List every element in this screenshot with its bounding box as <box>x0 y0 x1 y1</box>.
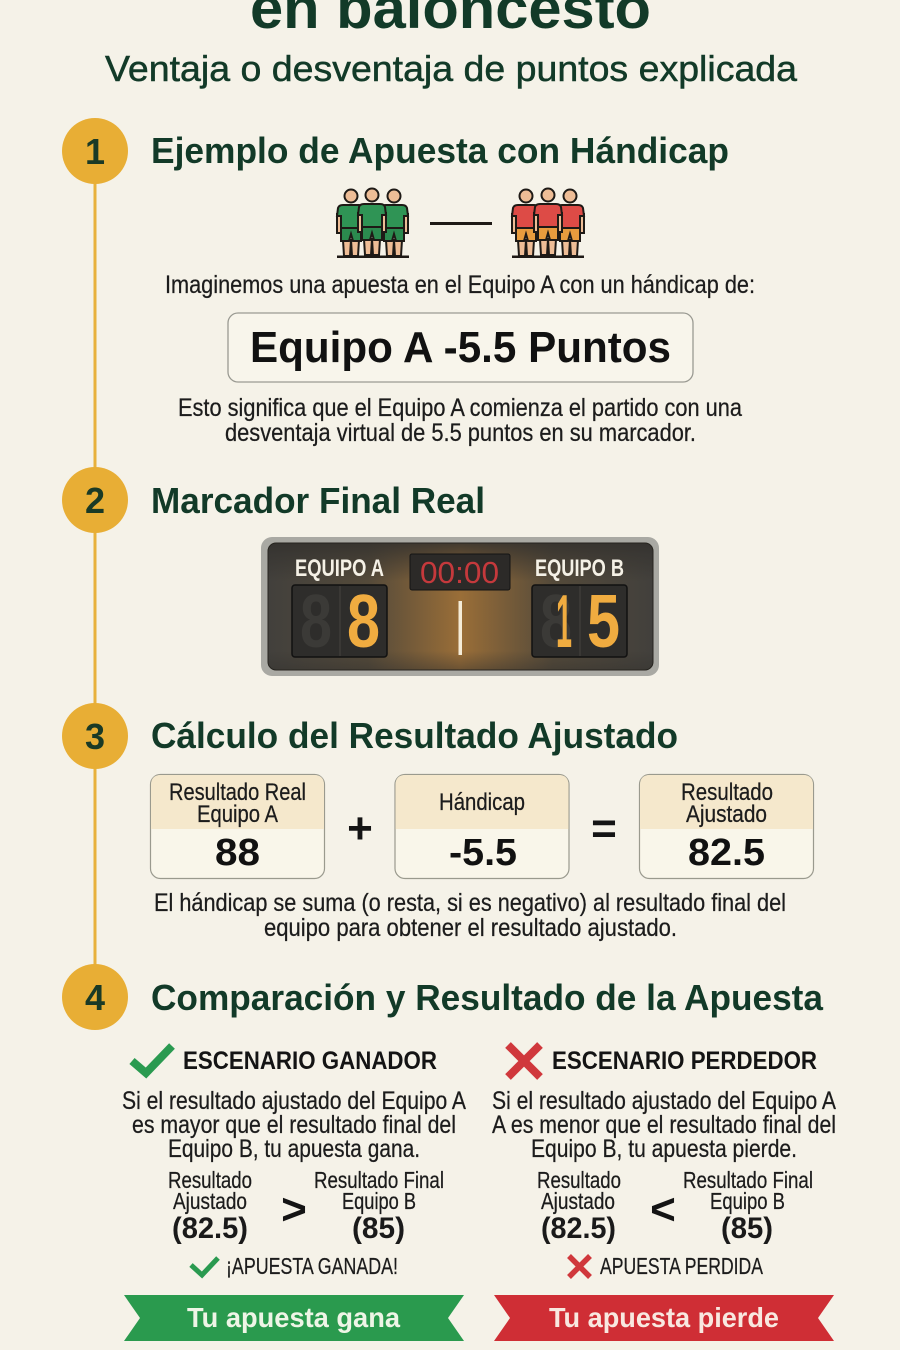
losing description: Equipo B, tu apuesta pierde. <box>531 1135 797 1163</box>
team B value: Equipo B <box>342 1188 416 1214</box>
adjusted result value: Resultado <box>537 1167 621 1193</box>
adjusted result value: Ajustado <box>541 1188 615 1214</box>
team B value: (85) <box>352 1212 405 1245</box>
team B value: Equipo B <box>710 1188 785 1214</box>
calc box: adjusted result <box>640 774 814 878</box>
less than sign: < <box>650 1185 676 1234</box>
calc box: real result: Resultado Real <box>169 779 306 806</box>
clock: 00:00 <box>420 555 499 590</box>
winning description: es mayor que el resultado final del <box>132 1111 456 1139</box>
explanation text: desventaja virtual de 5.5 puntos en su marcador. <box>225 419 696 447</box>
team B value <box>314 1167 444 1245</box>
winning description: Si el resultado ajustado del Equipo A <box>122 1087 466 1115</box>
red banner: Tu apuesta pierde <box>549 1302 779 1333</box>
calc explanation <box>154 889 786 942</box>
calc box: real result <box>150 774 324 878</box>
green banner <box>124 1295 464 1341</box>
greater than sign: > <box>281 1185 307 1234</box>
subtitle: Ventaja o desventaja de puntos explicada <box>105 48 798 89</box>
score team B: 1 <box>556 579 572 663</box>
versus dash <box>430 222 492 225</box>
adjusted result value: Resultado <box>168 1167 252 1193</box>
lost label: APUESTA PERDIDA <box>600 1253 763 1279</box>
step 1 badge: 1 <box>85 131 105 172</box>
calc box: handicap: Hándicap <box>439 789 525 816</box>
score team B <box>532 579 627 663</box>
adjusted result value: Ajustado <box>173 1188 247 1214</box>
explanation text <box>178 394 742 447</box>
step 2 badge: 2 <box>85 480 105 521</box>
adjusted result value <box>537 1167 621 1245</box>
panel: losing scenario <box>492 1045 836 1341</box>
heading: ejemplo: Ejemplo de Apuesta con Hándicap <box>151 130 729 171</box>
calc box: adjusted result: Resultado <box>681 779 773 806</box>
calc box: adjusted result: 82.5 <box>688 832 765 874</box>
losing heading: ESCENARIO PERDEDOR <box>552 1047 817 1075</box>
team B value <box>683 1167 813 1245</box>
losing description: A es menor que el resultado final del <box>492 1111 836 1139</box>
adjusted result value: (82.5) <box>172 1212 248 1245</box>
plus sign: + <box>347 804 373 853</box>
calc explanation: El hándicap se suma (o resta, si es negativo) al resultado final del <box>154 889 786 917</box>
heading: marcador: Marcador Final Real <box>151 480 485 521</box>
step 1 badge <box>62 118 128 184</box>
heading: calculo: Cálculo del Resultado Ajustado <box>151 715 678 756</box>
losing description: Si el resultado ajustado del Equipo A <box>492 1087 836 1115</box>
step 2 badge <box>62 467 128 533</box>
red banner <box>494 1295 834 1341</box>
heading: comparacion: Comparación y Resultado de la Apuesta <box>151 977 824 1018</box>
team B value: (85) <box>721 1212 773 1245</box>
calc box: real result: 88 <box>215 832 260 874</box>
score team A: 8 <box>300 579 332 663</box>
green banner: Tu apuesta gana <box>187 1302 400 1333</box>
center divider <box>458 601 462 655</box>
won label: ¡APUESTA GANADA! <box>226 1253 398 1279</box>
score team B: 5 <box>587 579 620 663</box>
team B value: Resultado Final <box>683 1167 813 1193</box>
score team A: 8 <box>347 579 380 663</box>
icon: green check <box>132 1046 172 1073</box>
calc box: handicap <box>395 774 569 878</box>
adjusted result value <box>168 1167 252 1245</box>
calc box: adjusted result: Ajustado <box>686 801 767 828</box>
calc box: real result: Equipo A <box>197 801 278 828</box>
panel: winning scenario <box>122 1046 466 1341</box>
score team A <box>292 579 387 663</box>
winning heading: ESCENARIO GANADOR <box>183 1047 437 1075</box>
icon: small check <box>191 1258 218 1275</box>
icon: team B players <box>512 188 584 258</box>
adjusted result value: (82.5) <box>541 1212 616 1245</box>
equals sign: = <box>591 804 617 853</box>
step 4 badge: 4 <box>85 977 105 1018</box>
explanation text: Esto significa que el Equipo A comienza el partido con una <box>178 394 742 422</box>
calc explanation: equipo para obtener el resultado ajustado. <box>264 914 677 942</box>
icon: small cross <box>569 1256 590 1277</box>
intro text: Imaginemos una apuesta en el Equipo A con un hándicap de: <box>165 271 755 299</box>
step 4 badge <box>62 964 128 1030</box>
winning description: Equipo B, tu apuesta gana. <box>168 1135 420 1163</box>
team B label: EQUIPO B <box>535 555 624 582</box>
handicap box <box>228 313 693 382</box>
calc box: handicap: -5.5 <box>449 832 517 874</box>
winning description <box>122 1087 466 1163</box>
losing description <box>492 1087 836 1163</box>
team A label: EQUIPO A <box>295 555 384 582</box>
scoreboard <box>261 537 659 676</box>
score team B: 8 <box>540 579 572 663</box>
timeline line <box>94 151 96 997</box>
icon: red cross <box>508 1045 540 1077</box>
step 3 badge: 3 <box>85 716 105 757</box>
handicap box: Equipo A -5.5 Puntos <box>250 323 671 372</box>
icon: team A players <box>337 188 409 258</box>
step 3 badge <box>62 703 128 769</box>
team B value: Resultado Final <box>314 1167 444 1193</box>
